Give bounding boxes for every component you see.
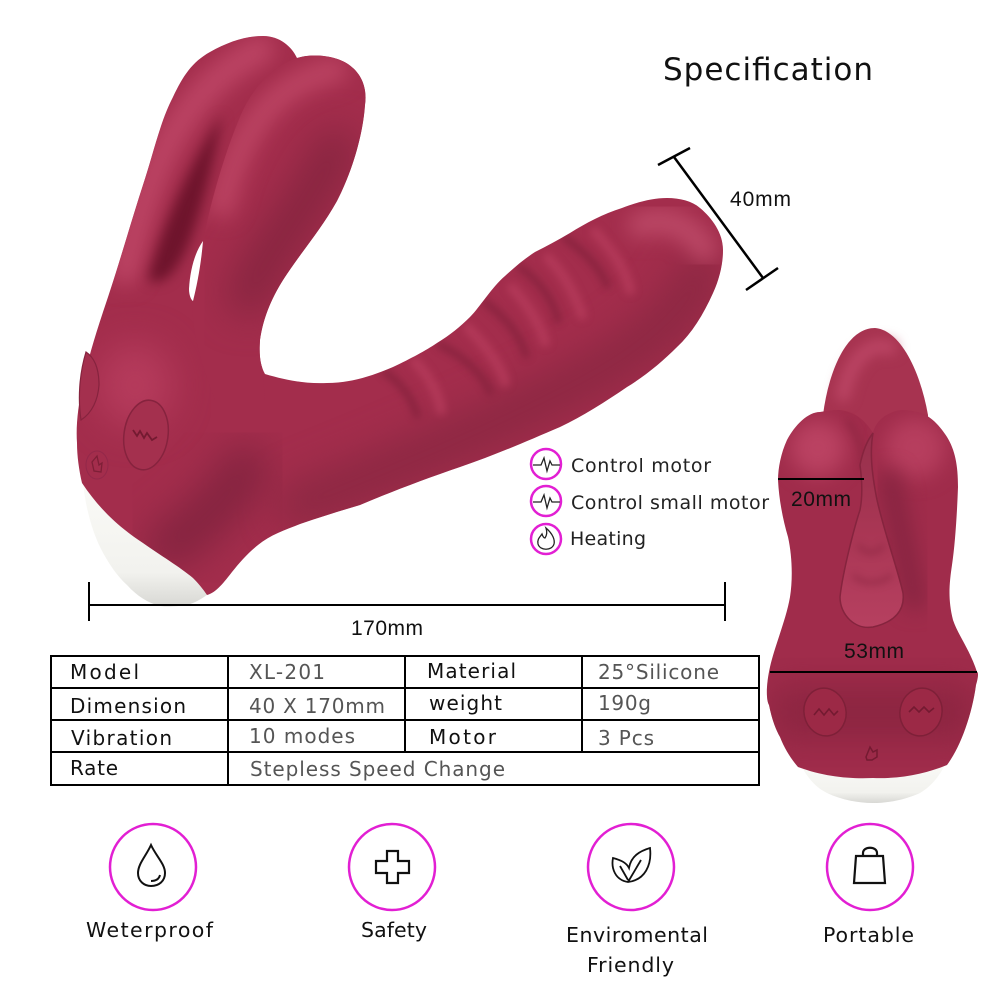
dimension: 40mm: 40mm: [730, 188, 791, 211]
centre shadow: [890, 480, 915, 600]
right button: [895, 684, 947, 740]
back ear highlight: [125, 50, 260, 270]
dimension: 53mm: 53mm: [844, 640, 904, 663]
shaft lower shadow: [300, 275, 700, 505]
main button: [119, 397, 173, 473]
dimension: 170mm: [89, 582, 725, 640]
feature: safety: Safety: [361, 918, 427, 942]
lower body shadow: [770, 685, 975, 740]
product: front view: [760, 328, 985, 803]
body lower shadow: [170, 470, 245, 545]
function legend: Heating: [570, 528, 646, 550]
feature: waterproof: Weterproof: [86, 918, 214, 942]
front ear: [208, 56, 366, 368]
heat icon: [866, 747, 877, 760]
icon: heating: [531, 524, 561, 554]
specification table: Vibration: [71, 726, 172, 750]
specification table: 190g: [598, 691, 651, 715]
teardrop ribs: [853, 545, 892, 582]
front ear shadow: [248, 150, 335, 295]
left ear highlight: [790, 420, 846, 476]
feature: environmental: Enviromental: [566, 923, 708, 947]
silhouette with shading: [60, 20, 740, 610]
opening between ears: [189, 241, 203, 301]
product: main side view: [60, 20, 740, 610]
shaft highlight: [640, 221, 705, 250]
function legend: Control small motor: [571, 492, 769, 514]
specification table: 40 X 170mm: [249, 694, 385, 718]
rear shaft: [823, 328, 928, 440]
feature: environmental: [566, 824, 708, 977]
dimension: 40mm: [658, 148, 791, 290]
body: [766, 411, 978, 778]
specification table: Dimension: [70, 694, 186, 718]
function legend: Control motor: [571, 455, 711, 477]
feature: environmental: Friendly: [587, 953, 674, 977]
specification table: Stepless Speed Change: [250, 757, 505, 781]
specification table: 3 Pcs: [598, 726, 654, 750]
specification table: 10 modes: [249, 724, 355, 748]
right ear highlight: [885, 418, 945, 478]
body left highlight: [99, 345, 172, 422]
front ear highlight: [222, 70, 335, 205]
ribs: [385, 232, 630, 415]
right button wave: [909, 707, 934, 712]
white end cap: [798, 760, 947, 803]
heat icon: [86, 451, 108, 479]
specification table: Material: [427, 659, 516, 683]
left button wave: [814, 709, 838, 715]
dimension: 170mm: 170mm: [351, 617, 423, 640]
button wave: [133, 430, 157, 440]
function legend: [531, 449, 769, 554]
side button: [79, 352, 99, 420]
shadow between ears: [148, 115, 222, 282]
icon: control motor: [531, 449, 561, 479]
icon: control small motor: [531, 486, 561, 516]
left button: [799, 684, 851, 740]
feature: portable: [823, 824, 914, 947]
shaft highlight: [843, 346, 890, 395]
specification table: Rate: [70, 756, 118, 780]
feature: safety: [349, 824, 435, 942]
feature: waterproof: [86, 824, 214, 942]
white end cap: [82, 470, 215, 606]
title: Specification: [663, 52, 873, 88]
specification table: Motor: [429, 725, 497, 749]
dimension: 20mm: 20mm: [791, 488, 851, 511]
specification table: XL-201: [249, 660, 325, 684]
specification table: [51, 656, 759, 785]
specification table: weight: [429, 691, 502, 715]
feature: portable: Portable: [823, 923, 914, 947]
centre gap and teardrop opening: [840, 433, 903, 627]
dimension: 20mm: [778, 479, 864, 511]
specification table: 25°Silicone: [598, 660, 719, 684]
specification table: Model: [70, 660, 139, 684]
left ear edge: [847, 420, 863, 470]
